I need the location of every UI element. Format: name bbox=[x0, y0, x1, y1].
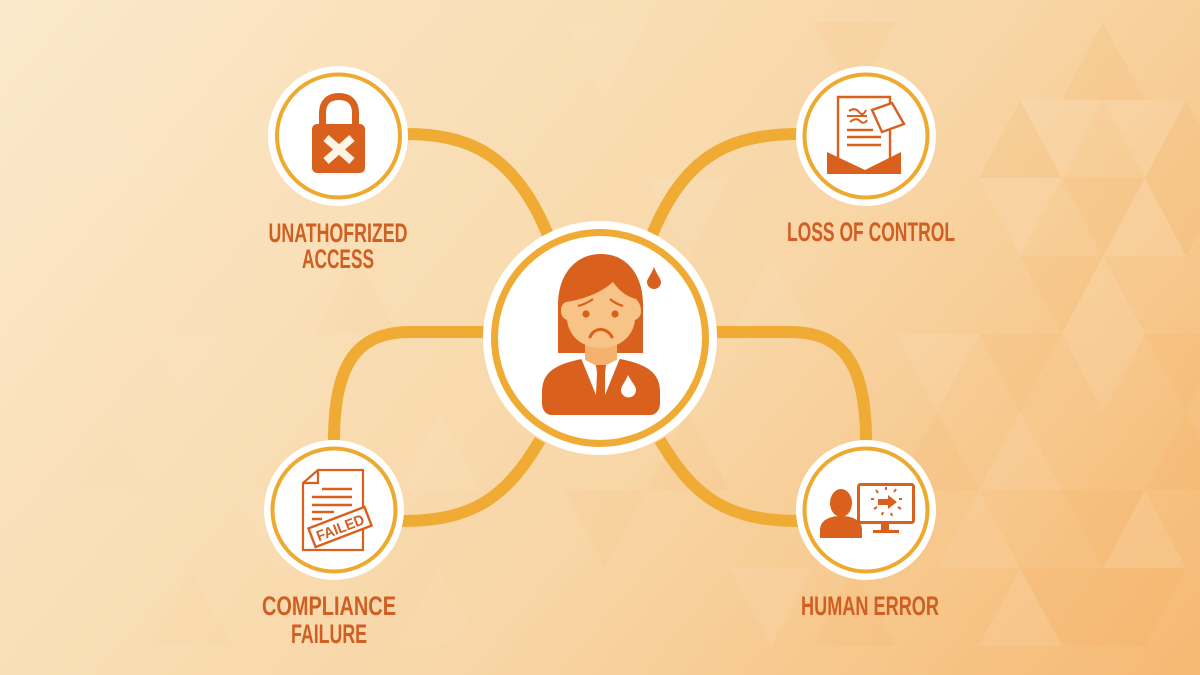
node: loss of control bbox=[787, 66, 955, 247]
node: unauthorized access: ACCESS bbox=[302, 244, 374, 274]
label: UNATHOFRIZED bbox=[268, 218, 408, 248]
icon: failed document: FAILED bbox=[314, 511, 367, 545]
label: COMPLIANCE bbox=[262, 591, 396, 621]
icon: padlock with x bbox=[312, 96, 365, 173]
icon: failed document bbox=[303, 470, 372, 550]
node: compliance failure bbox=[262, 440, 404, 649]
icon: envelope with document bbox=[827, 97, 904, 174]
connector: top-right bbox=[652, 134, 800, 235]
connector: bottom-right bbox=[660, 332, 866, 521]
node: compliance failure: FAILURE bbox=[291, 619, 367, 649]
connector: top-left bbox=[405, 134, 548, 235]
central circle: worried woman bbox=[483, 221, 717, 455]
label: HUMAN ERROR bbox=[801, 591, 939, 621]
node: unauthorized access bbox=[268, 66, 408, 274]
label: LOSS OF CONTROL bbox=[787, 217, 955, 247]
node: human error bbox=[796, 440, 939, 621]
icon: worried employee bbox=[542, 254, 661, 415]
connector: bottom-left bbox=[334, 332, 540, 521]
icon: person at monitor bbox=[820, 484, 914, 538]
